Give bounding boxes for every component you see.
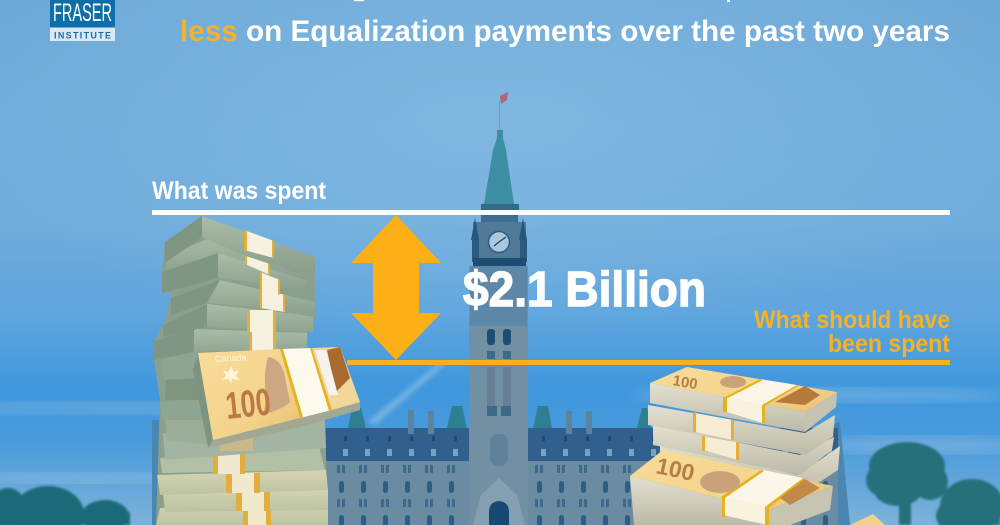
label: what should have been spent: been spent xyxy=(828,330,951,358)
bill face xyxy=(198,349,300,440)
line: what was spent xyxy=(152,210,950,215)
lower bundles xyxy=(156,420,328,525)
flag xyxy=(499,100,500,132)
clock section xyxy=(481,215,518,223)
country name: Canada xyxy=(215,352,247,364)
bundle xyxy=(154,329,307,360)
portrait xyxy=(700,471,740,493)
trees left xyxy=(0,486,130,525)
line: what should have been spent xyxy=(347,360,950,365)
spire xyxy=(484,130,514,204)
end towers xyxy=(152,420,850,525)
walls with windows xyxy=(160,461,838,525)
second bundle xyxy=(648,405,835,455)
tower windows xyxy=(487,329,511,466)
stack silhouette xyxy=(154,216,328,525)
front $100 bundle xyxy=(193,347,360,448)
shaft xyxy=(469,266,528,525)
title line: less on Equalization payments over the past two years xyxy=(180,15,950,48)
bundle side xyxy=(193,353,213,448)
left money stack xyxy=(154,216,360,525)
bundle xyxy=(163,304,313,337)
label: what should have been spent xyxy=(754,306,951,358)
third bundle xyxy=(660,442,840,495)
denomination: 100 xyxy=(224,381,273,428)
logo: Fraser Institute xyxy=(50,0,115,41)
bill end xyxy=(312,347,360,410)
portrait xyxy=(720,376,746,388)
portrait xyxy=(264,357,290,414)
bundle xyxy=(166,235,306,280)
top bundle xyxy=(650,367,837,432)
door arch xyxy=(473,478,525,525)
chimneys xyxy=(408,410,592,434)
denomination: 100 xyxy=(671,372,699,393)
turret roofs xyxy=(348,406,651,428)
large front bundle xyxy=(630,450,833,525)
paper band xyxy=(280,348,332,418)
logo: Fraser Institute: INSTITUTE xyxy=(54,30,111,40)
bundle xyxy=(171,280,315,317)
right money stack xyxy=(630,367,885,525)
lower bundle left edge xyxy=(636,505,770,525)
parliament building xyxy=(152,92,850,525)
bundle xyxy=(162,253,307,295)
peace tower xyxy=(469,92,528,525)
clock xyxy=(488,232,510,252)
value: $2.1 Billion: $2.1 Billion xyxy=(463,263,706,317)
label: what should have been spent: What should have xyxy=(754,306,950,334)
trees right xyxy=(866,442,1000,525)
second bundle lower xyxy=(653,425,834,475)
top bundle xyxy=(165,216,315,273)
small bill bottom right xyxy=(850,514,885,525)
roof wings xyxy=(160,428,838,461)
gold arrow xyxy=(351,215,441,360)
maple leaf xyxy=(222,366,240,385)
upper left bundles xyxy=(160,352,212,445)
label: what was spent: What was spent xyxy=(152,177,327,205)
denomination: 100 xyxy=(654,452,697,486)
